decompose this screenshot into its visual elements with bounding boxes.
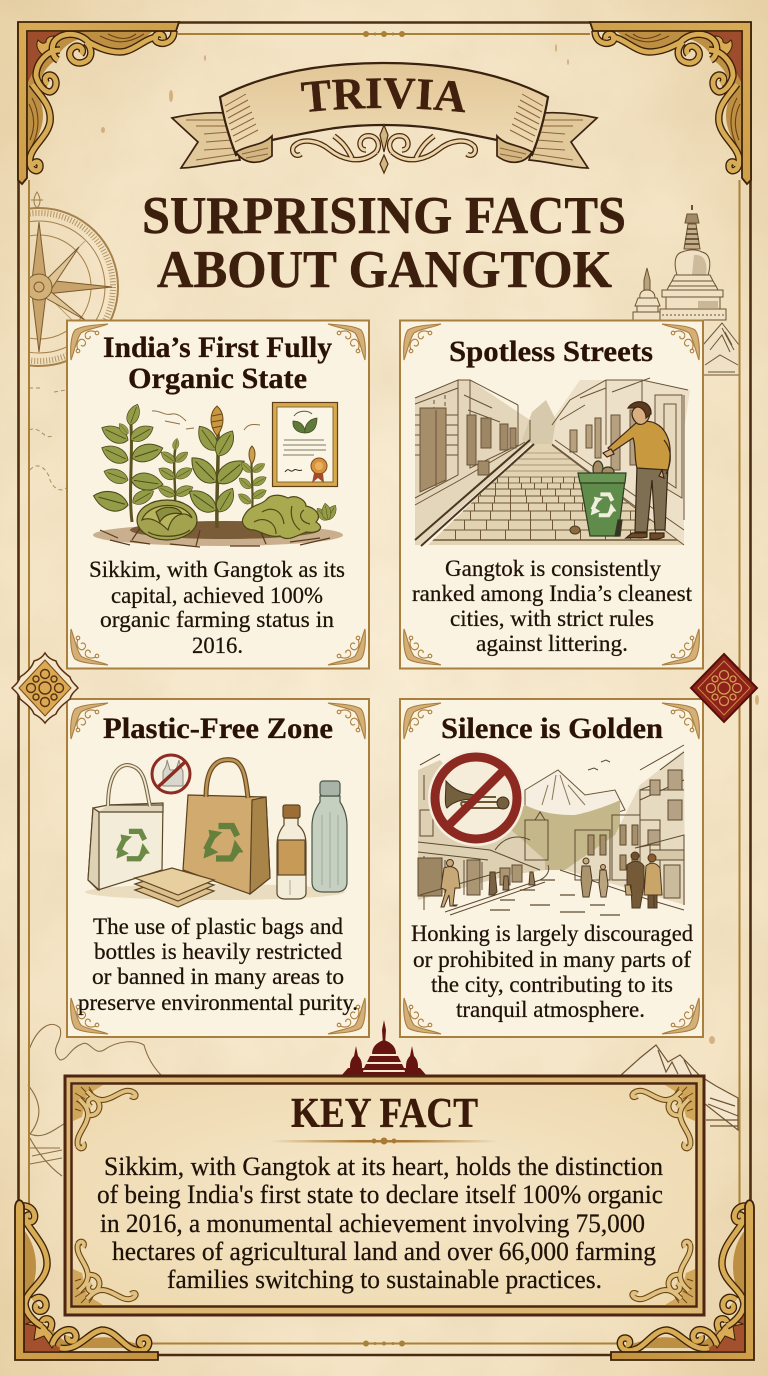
heading: plastic free zone: Plastic-Free Zone (103, 712, 333, 745)
kraft bag (183, 760, 270, 894)
cabbage (137, 500, 197, 540)
heading: key fact: KEY FACT (291, 1091, 478, 1137)
cloth bag (88, 765, 163, 890)
heading: silence is golden: Silence is Golden (441, 712, 663, 745)
prohibition sign: plastic bag (152, 755, 190, 793)
body: silence is golden: or prohibited in many parts of (413, 947, 691, 972)
ornament: frame corner bottom right (611, 1200, 754, 1360)
body: silence is golden (411, 921, 693, 1022)
recycling bin (578, 461, 626, 536)
body: key fact: families switching to sustainable practices. (167, 1265, 602, 1294)
body: spotless streets: cities, with strict rules (450, 606, 654, 631)
steel bottle (312, 781, 347, 892)
background sketch: bottom right mountains (620, 1045, 738, 1130)
banner: trivia heading (300, 78, 466, 112)
body: organic state: Sikkim, with Gangtok as its (89, 557, 345, 582)
ornament: frame corner top left (18, 22, 179, 184)
heading: organic state: Organic State (128, 362, 307, 395)
certificate (272, 402, 338, 486)
panel: silence is golden (400, 699, 703, 1037)
heading: spotless streets: Spotless Streets (449, 335, 653, 368)
body: plastic free zone: The use of plastic bags and (93, 914, 343, 939)
large stupa dome (675, 250, 710, 275)
body: key fact: Sikkim, with Gangtok at its heart, holds the distinction (104, 1152, 663, 1181)
heading: organic state (103, 331, 332, 395)
illustration: reusable bags and bottles (85, 755, 347, 907)
body: organic state: organic farming status in (100, 607, 335, 632)
body: key fact: in 2016, a monumental achievement involving 75,000 (100, 1209, 645, 1238)
glass bottle with label (277, 805, 306, 899)
body: spotless streets (412, 556, 693, 656)
illustration: clean street scene (415, 378, 690, 546)
birds and cloud sketch (152, 411, 260, 430)
body: key fact: of being India's first state to declare itself 100% organic (97, 1180, 663, 1209)
body: silence is golden: the city, contributing to its (431, 972, 673, 997)
background sketch: large and small stupa (633, 205, 726, 320)
ornament: maroon stupa (341, 1020, 427, 1076)
body: plastic free zone: preserve environmental purity. (78, 990, 358, 1015)
ornament: right diamond (691, 654, 757, 722)
man dropping litter (603, 402, 670, 539)
title: ABOUT GANGTOK (157, 241, 612, 299)
ornament: flourish under banner (293, 125, 475, 173)
body: silence is golden: Honking is largely discouraged (411, 921, 693, 946)
panel: key fact (65, 1076, 704, 1315)
ornament: frame corner bottom left (15, 1200, 158, 1360)
illustration: organic plants and certificate (91, 402, 343, 547)
large stupa spire (684, 205, 700, 249)
key fact corners (73, 1085, 695, 1305)
plant three leaves and wheat (184, 406, 249, 517)
horn icon (445, 781, 509, 809)
cobblestones (420, 453, 690, 540)
ornament: left diamond (12, 653, 78, 723)
body: plastic free zone (78, 914, 358, 1015)
body: plastic free zone: bottles is heavily restricted (94, 939, 342, 964)
body: silence is golden: tranquil atmosphere. (456, 997, 645, 1022)
panel: plastic free zone (67, 699, 369, 1037)
plant four leaves (236, 446, 268, 506)
body: organic state (89, 557, 345, 658)
background sketch: compass (30, 191, 119, 367)
prohibition sign: no horn (428, 750, 524, 846)
divider ornament (270, 1138, 498, 1144)
body: plastic free zone: or banned in many areas to (92, 964, 344, 989)
body: spotless streets: against littering. (476, 631, 628, 656)
illustration: quiet street (418, 745, 685, 915)
background sketch: bottom map (28, 1024, 162, 1176)
far right sprout (314, 503, 339, 523)
large stupa tiers (660, 275, 726, 320)
litter stone (570, 526, 580, 534)
title (142, 187, 626, 299)
lettuce (242, 495, 321, 539)
panel: organic state (67, 320, 369, 668)
background sketch: right mountain top (703, 323, 739, 375)
folded cloths (135, 868, 214, 907)
body: key fact (97, 1152, 663, 1294)
banner: trivia ribbon (172, 63, 597, 168)
plant two leaves (156, 438, 195, 500)
background sketch: left map (29, 388, 66, 490)
body: spotless streets: Gangtok is consistently (445, 556, 661, 581)
pedestrians (441, 852, 662, 908)
body: key fact: hectares of agricultural land and over 66,000 farming (112, 1237, 656, 1266)
plant one leaves (91, 402, 165, 515)
body: organic state: 2016. (192, 633, 243, 658)
title: SURPRISING FACTS (142, 187, 626, 245)
banner: trivia heading: TRIVIA (300, 78, 466, 112)
panel: spotless streets (400, 320, 703, 668)
ornament: frame corner top right (590, 22, 751, 184)
heading: organic state: India’s First Fully (103, 331, 332, 364)
body: organic state: capital, achieved 100% (111, 583, 323, 608)
body: spotless streets: ranked among India’s cleanest (412, 581, 693, 606)
small stupa (633, 268, 660, 320)
